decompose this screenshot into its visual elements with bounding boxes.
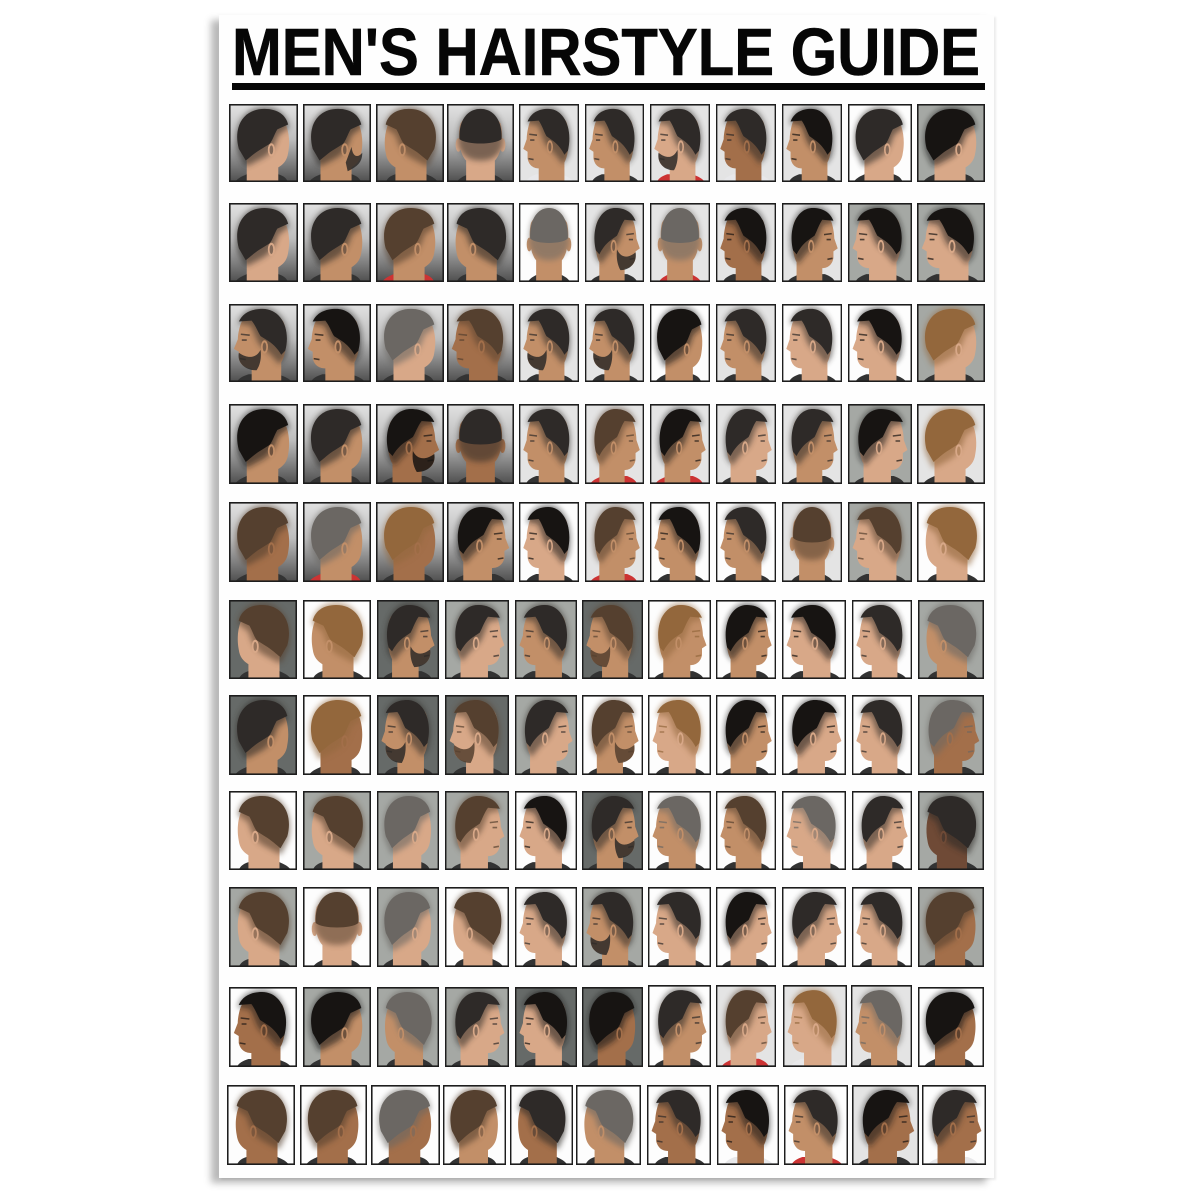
photo row 11 — [227, 1085, 986, 1165]
photo: back of head fade — [447, 104, 514, 182]
photo: short crop — [917, 104, 985, 182]
photo: bald fade crop — [376, 203, 444, 282]
photo: line design fade — [782, 404, 842, 484]
photo: side swept fade — [229, 404, 298, 484]
photo: smooth buzz — [918, 887, 984, 967]
photo: boxed line-up — [377, 695, 439, 775]
photo: grey fade — [377, 791, 439, 870]
photo: dark crop — [716, 887, 776, 967]
photo: rear low cut — [447, 404, 514, 484]
photo: pompadour fade — [782, 695, 846, 775]
photo: hard part fade — [782, 104, 842, 182]
photo: parted crop — [848, 404, 912, 484]
photo: spiky crop — [229, 203, 298, 282]
photo: taper fade — [848, 104, 912, 182]
photo: low taper left — [784, 1085, 848, 1165]
photo: dark crop — [447, 502, 514, 582]
photo: flat top — [717, 1085, 779, 1165]
photo row 9 — [229, 887, 984, 967]
photo: classic taper right — [443, 1085, 506, 1165]
photo: classic taper — [303, 404, 371, 484]
photo: bearded design — [582, 887, 643, 967]
photo: brushed fringe — [716, 502, 776, 582]
photo: brown taper — [848, 502, 912, 582]
photo row 3 — [229, 304, 985, 382]
photo: skin fade — [229, 600, 297, 679]
photo: curly crop — [716, 104, 776, 182]
photo: side part fade — [782, 600, 846, 679]
photo: dark short crop — [716, 600, 776, 679]
photo: textured crop — [303, 304, 371, 382]
photo: rounded taper — [922, 1085, 986, 1165]
title underline — [232, 83, 985, 90]
photo: glasses and part — [852, 695, 912, 775]
photo: pompadour fade — [848, 304, 912, 382]
photo: shaved head — [376, 502, 444, 582]
photo: sand fade — [377, 887, 439, 967]
photo: bearded fade — [582, 600, 643, 679]
photo: mohawk fade — [303, 203, 371, 282]
photo: classic short — [445, 791, 509, 870]
photo: maroon crop — [716, 791, 776, 870]
photo: line-up fade — [445, 600, 509, 679]
photo: boy taper — [585, 404, 644, 484]
title: MEN'S HAIRSTYLE GUIDE — [232, 15, 980, 90]
photo: fade with chin strap — [229, 304, 298, 382]
photo: hard part crop — [515, 887, 577, 967]
photo: burgundy crop — [447, 304, 514, 382]
photo row 1 — [229, 104, 985, 182]
photo: sandy crop — [229, 887, 297, 967]
photo row 6 — [229, 600, 984, 679]
photo: buzz fade — [918, 600, 984, 679]
photo: salt and pepper crop — [852, 887, 912, 967]
photo: grey haired man — [851, 985, 912, 1067]
photo: boy with part — [519, 404, 579, 484]
photo: braids — [716, 304, 776, 382]
photo: dark high fade — [582, 987, 643, 1067]
photo: mid fade — [848, 203, 912, 282]
photo: curly line design — [303, 987, 371, 1067]
photo: fade with goatee — [377, 600, 439, 679]
photo: boy fringe — [519, 502, 579, 582]
photo: front crop — [716, 404, 776, 484]
photo: hard part crop — [917, 203, 985, 282]
photo: curly top — [585, 304, 644, 382]
photo: low fade with beard — [303, 104, 371, 182]
photo: dark high fade — [852, 1085, 919, 1165]
photo: light brown taper — [917, 404, 985, 484]
photo: skin fade rear — [377, 987, 439, 1067]
photo: buzz taper — [303, 600, 371, 679]
photo: dark skin taper — [918, 987, 984, 1067]
photo: high fade with beard — [650, 104, 710, 182]
photo: pink toned fade — [648, 887, 711, 967]
photo: rear buzz with chain — [650, 203, 710, 282]
photo row 8 — [229, 791, 984, 870]
photo: textured skin fade — [229, 695, 297, 775]
photo: bearded high fade — [582, 791, 643, 870]
photo: profile fade — [519, 104, 579, 182]
photo: crop with fade — [510, 1085, 573, 1165]
photo: fringe fade — [650, 404, 710, 484]
photo: glasses with beard — [852, 600, 912, 679]
photo: blocky line-up — [445, 987, 509, 1067]
photo: boy side part — [917, 502, 985, 582]
photo: curly fade — [519, 304, 579, 382]
photo: curly crop line-up — [445, 695, 509, 775]
photo: high curls — [650, 304, 710, 382]
photo: fade with thick beard — [376, 404, 444, 484]
photo: shaved head with shades — [648, 600, 711, 679]
photo: low fade right — [300, 1085, 367, 1165]
photo: blond child — [783, 985, 847, 1067]
photo: hard part — [515, 791, 577, 870]
photo: grey taper — [576, 1085, 641, 1165]
photo: buzz with neck fade — [371, 1085, 440, 1165]
photo: dark skin buzz — [918, 791, 984, 870]
photo: rounded buzz — [303, 695, 371, 775]
photo row 7 — [229, 695, 984, 775]
poster sheet — [219, 15, 994, 1178]
photo: boy hard part — [229, 987, 297, 1067]
photo: brown short — [445, 887, 509, 967]
photo: profile fade with stubble — [585, 104, 644, 182]
photo: slick crop — [716, 695, 776, 775]
photo: spiked blue fade — [650, 502, 710, 582]
photo: grey buzz cut — [303, 502, 371, 582]
photo: grey buzz — [376, 304, 444, 382]
photo: textured fringe — [716, 203, 776, 282]
photo: blonde quiff — [917, 304, 985, 382]
photo: angled fade — [515, 987, 577, 1067]
photo: fade with full beard — [585, 203, 644, 282]
photo row 4 — [229, 404, 985, 484]
photo: rear buzz taper — [519, 203, 579, 282]
photo: light brown crop — [229, 791, 297, 870]
photo row 2 — [229, 203, 985, 282]
photo: tapered crop rear view — [376, 104, 444, 182]
photo: spiked crop — [782, 887, 846, 967]
photo: fade with full beard — [582, 695, 643, 775]
photo: short taper — [918, 695, 984, 775]
photo: flat top fade — [782, 304, 842, 382]
photo: long top fade — [782, 203, 842, 282]
photo: wave design — [782, 502, 842, 582]
photo: mid fade left — [647, 1085, 711, 1165]
photo: rear combed taper — [303, 887, 371, 967]
photo: spiky textured fade — [229, 104, 298, 182]
photo: mature side crop — [648, 985, 711, 1067]
photo row 10 — [229, 985, 984, 1067]
photo: design fade right — [515, 695, 577, 775]
photo: boy crop — [716, 985, 776, 1067]
photo: boy short fade — [585, 502, 644, 582]
photo: waves crop — [447, 203, 514, 282]
photo: child buzz — [229, 502, 298, 582]
photo: textured taper — [303, 791, 371, 870]
photo: shaved head — [648, 695, 711, 775]
photo: blue tipped crop — [648, 791, 711, 870]
photo: balding short — [782, 791, 846, 870]
photo: dark brushed crop — [852, 791, 912, 870]
photo row 5 — [229, 502, 985, 582]
photo: short taper left — [227, 1085, 295, 1165]
photo: design fade — [515, 600, 577, 679]
